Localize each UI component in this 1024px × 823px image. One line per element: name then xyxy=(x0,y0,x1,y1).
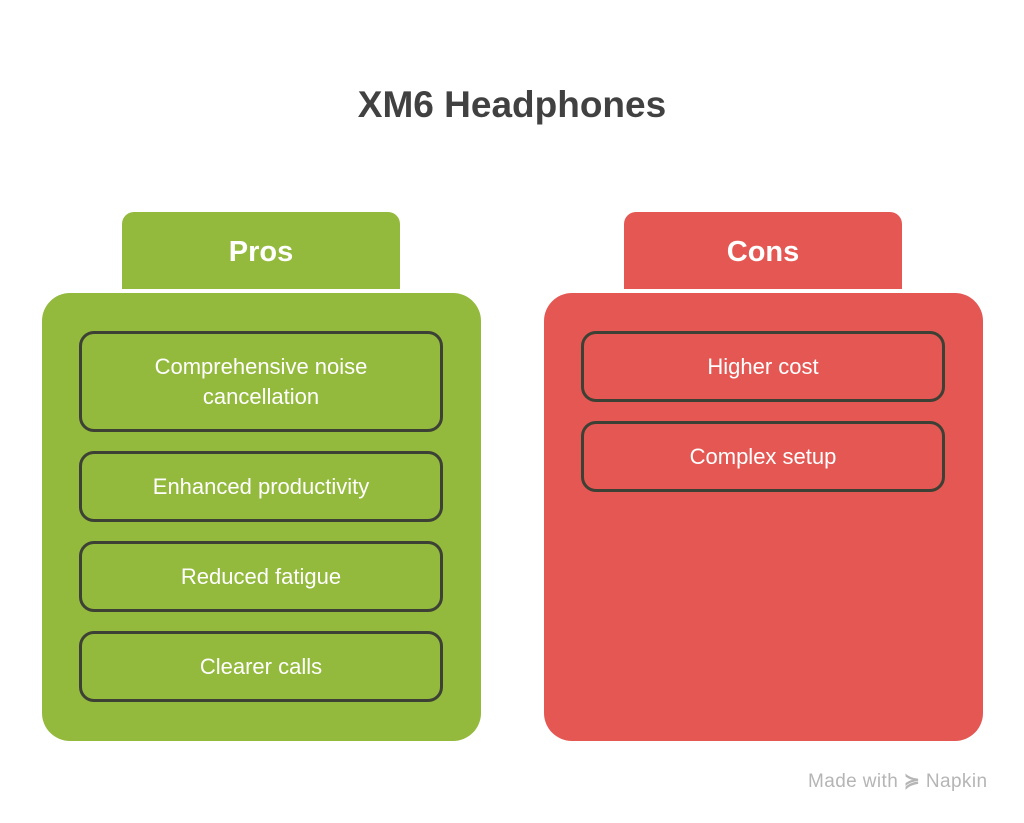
panel: cons xyxy=(544,212,983,741)
pros tab xyxy=(122,212,400,289)
item: setup xyxy=(581,421,945,492)
item: noise cancellation: Comprehensive noise xyxy=(155,354,367,378)
cons tab: Cons xyxy=(727,236,799,268)
item: calls: Clearer calls xyxy=(200,654,322,678)
cons body xyxy=(544,293,983,741)
pros body xyxy=(42,293,481,741)
item: fatigue xyxy=(79,541,443,612)
item: calls xyxy=(79,631,443,702)
cons tab xyxy=(624,212,902,289)
item: cost xyxy=(581,331,945,402)
panel: pros xyxy=(42,212,481,741)
item: fatigue: Reduced fatigue xyxy=(181,564,341,588)
item: productivity: Enhanced productivity xyxy=(153,474,369,498)
title: XM6 Headphones xyxy=(358,84,666,125)
pros tab: Pros xyxy=(229,236,293,268)
item: cost: Higher cost xyxy=(707,354,819,378)
item: noise cancellation: cancellation xyxy=(203,384,319,408)
item: productivity xyxy=(79,451,443,522)
item: noise cancellation xyxy=(79,331,443,432)
footer: made with napkin: Made with ≽ Napkin xyxy=(808,771,987,792)
item: setup: Complex setup xyxy=(690,444,836,468)
